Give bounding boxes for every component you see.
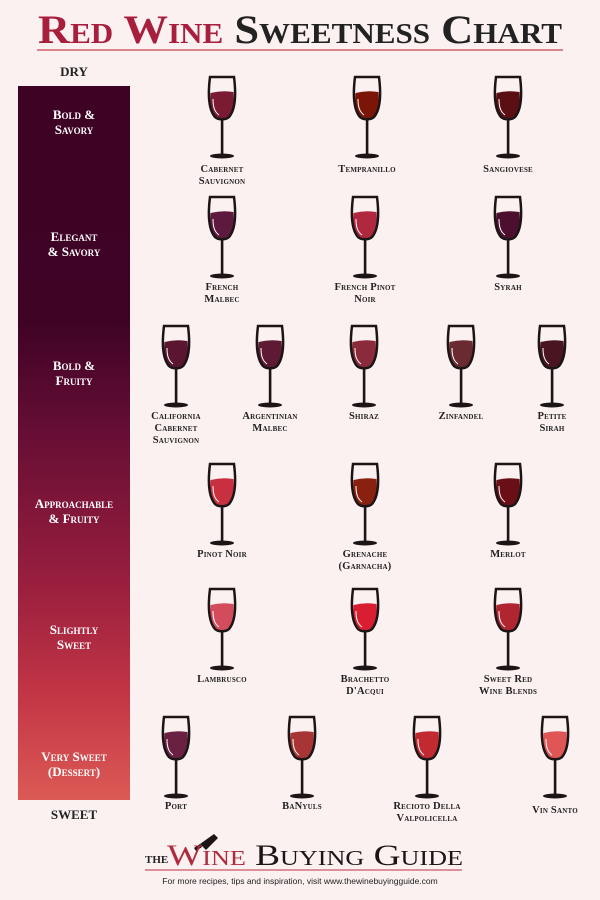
- label: sweet red wine blends: Wine Blends: [479, 686, 537, 697]
- category: very sweet: (Dessert): [48, 764, 100, 779]
- label: recioto della valpolicella: Recioto Della: [393, 801, 461, 812]
- label: sweet red wine blends: Sweet Red: [484, 674, 532, 685]
- title: Red Wine Sweetness Chart: [38, 7, 562, 52]
- label: french malbec: [204, 282, 240, 305]
- label: pinot noir: Pinot Noir: [197, 549, 247, 560]
- glass: french pinot noir: [350, 196, 380, 278]
- category: slightly sweet: Sweet: [57, 637, 91, 652]
- category: very sweet: Very Sweet: [41, 749, 107, 764]
- label: brachetto: [340, 674, 389, 697]
- label: french malbec: Malbec: [204, 294, 240, 305]
- glass: brachetto: [350, 588, 380, 670]
- label: vin santo: Vin Santo: [532, 805, 578, 816]
- label: french malbec: French: [206, 282, 238, 293]
- category: bold & savory: Bold &: [53, 107, 95, 122]
- glass: recioto: [412, 716, 442, 798]
- label: argentinian malbec: Malbec: [252, 423, 288, 434]
- glass: banyuls: [288, 716, 316, 798]
- label: banyuls: BaNyuls: [282, 801, 322, 812]
- category: slightly sweet: [50, 622, 98, 652]
- label: california cabernet sauvignon: [151, 411, 201, 446]
- sweetness gradient bar: [18, 86, 130, 800]
- label: french pinot noir: [334, 282, 396, 305]
- label: recioto della valpolicella: [393, 801, 461, 824]
- glass: port: [162, 716, 190, 798]
- category: approachable & fruity: Approachable: [35, 496, 113, 511]
- label: brachetto: Brachetto: [341, 674, 389, 685]
- footer text: For more recipes, tips and inspiration, visit www.thewinebuyingguide.com: [162, 876, 438, 886]
- label: cabernet sauvignon: [199, 164, 245, 187]
- glass: tempranillo: [352, 76, 382, 158]
- label: california cabernet sauvignon: California: [151, 411, 201, 422]
- label: sangiovese: Sangiovese: [483, 164, 533, 175]
- glass: zinfandel: [446, 324, 476, 408]
- label: cabernet sauvignon: Sauvignon: [199, 176, 245, 187]
- glass: petite sirah: [538, 324, 566, 408]
- glass: french malbec: [208, 196, 236, 278]
- label: french pinot noir: Noir: [354, 294, 376, 305]
- label: port: Port: [165, 801, 187, 812]
- label: grenache: (Garnacha): [339, 561, 391, 572]
- label: grenache: Grenache: [343, 549, 387, 560]
- category: very sweet: [41, 749, 107, 779]
- label: zinfandel: Zinfandel: [439, 411, 483, 422]
- category: approachable & fruity: [34, 496, 113, 526]
- glass: california cabernet: [162, 324, 190, 408]
- category: bold & savory: Savory: [55, 122, 93, 137]
- glass: syrah: [494, 196, 522, 278]
- category: approachable & fruity: & Fruity: [48, 511, 100, 526]
- label: french pinot noir: French Pinot: [334, 282, 396, 293]
- label: cabernet sauvignon: Cabernet: [200, 164, 244, 175]
- glass: argentinian malbec: [256, 324, 284, 408]
- label: california cabernet sauvignon: Cabernet: [154, 423, 198, 434]
- label: grenache: [338, 549, 391, 572]
- label: california cabernet sauvignon: Sauvignon: [153, 435, 199, 446]
- category: slightly sweet: Slightly: [50, 622, 98, 637]
- label: petite sirah: Sirah: [539, 423, 565, 434]
- category: bold & fruity: Bold &: [53, 358, 95, 373]
- glass: cabernet sauvignon: [208, 76, 236, 158]
- glass: vin santo: [540, 716, 570, 798]
- category: bold & savory: [53, 107, 95, 137]
- label: sweet: SWEET: [51, 807, 97, 822]
- label: merlot: Merlot: [490, 549, 526, 560]
- label: argentinian malbec: Argentinian: [242, 411, 298, 422]
- label: lambrusco: Lambrusco: [197, 674, 247, 685]
- glass: merlot: [494, 462, 522, 546]
- label: dry: DRY: [60, 64, 88, 79]
- category: elegant & savory: & Savory: [48, 244, 100, 259]
- label: sweet red wine blends: [479, 674, 537, 697]
- label: shiraz: Shiraz: [349, 411, 379, 422]
- category: bold & fruity: [53, 358, 95, 388]
- category: elegant & savory: Elegant: [51, 229, 97, 244]
- icon: pouring bottle: [194, 834, 218, 851]
- glass: shiraz: [350, 324, 378, 408]
- label: brachetto: D'Acqui: [346, 686, 384, 697]
- label: recioto della valpolicella: Valpolicella: [397, 813, 457, 824]
- label: petite sirah: Petite: [537, 411, 566, 422]
- glass: grenache: [350, 462, 380, 546]
- logo: the wine buying guide: Wine Buying Guide: [167, 839, 463, 872]
- logo: the wine buying guide: THE: [145, 854, 168, 866]
- label: tempranillo: Tempranillo: [338, 164, 396, 175]
- glass: sangiovese: [494, 76, 522, 158]
- category: bold & fruity: Fruity: [56, 373, 92, 388]
- glass: sweet red blends: [494, 588, 522, 670]
- glass: pinot noir: [208, 462, 236, 546]
- category: elegant & savory: [48, 229, 100, 259]
- glass: lambrusco: [208, 588, 236, 670]
- label: argentinian malbec: [242, 411, 298, 434]
- label: petite sirah: [537, 411, 566, 434]
- label: syrah: Syrah: [494, 282, 522, 293]
- logo: the wine buying guide: [145, 834, 463, 872]
